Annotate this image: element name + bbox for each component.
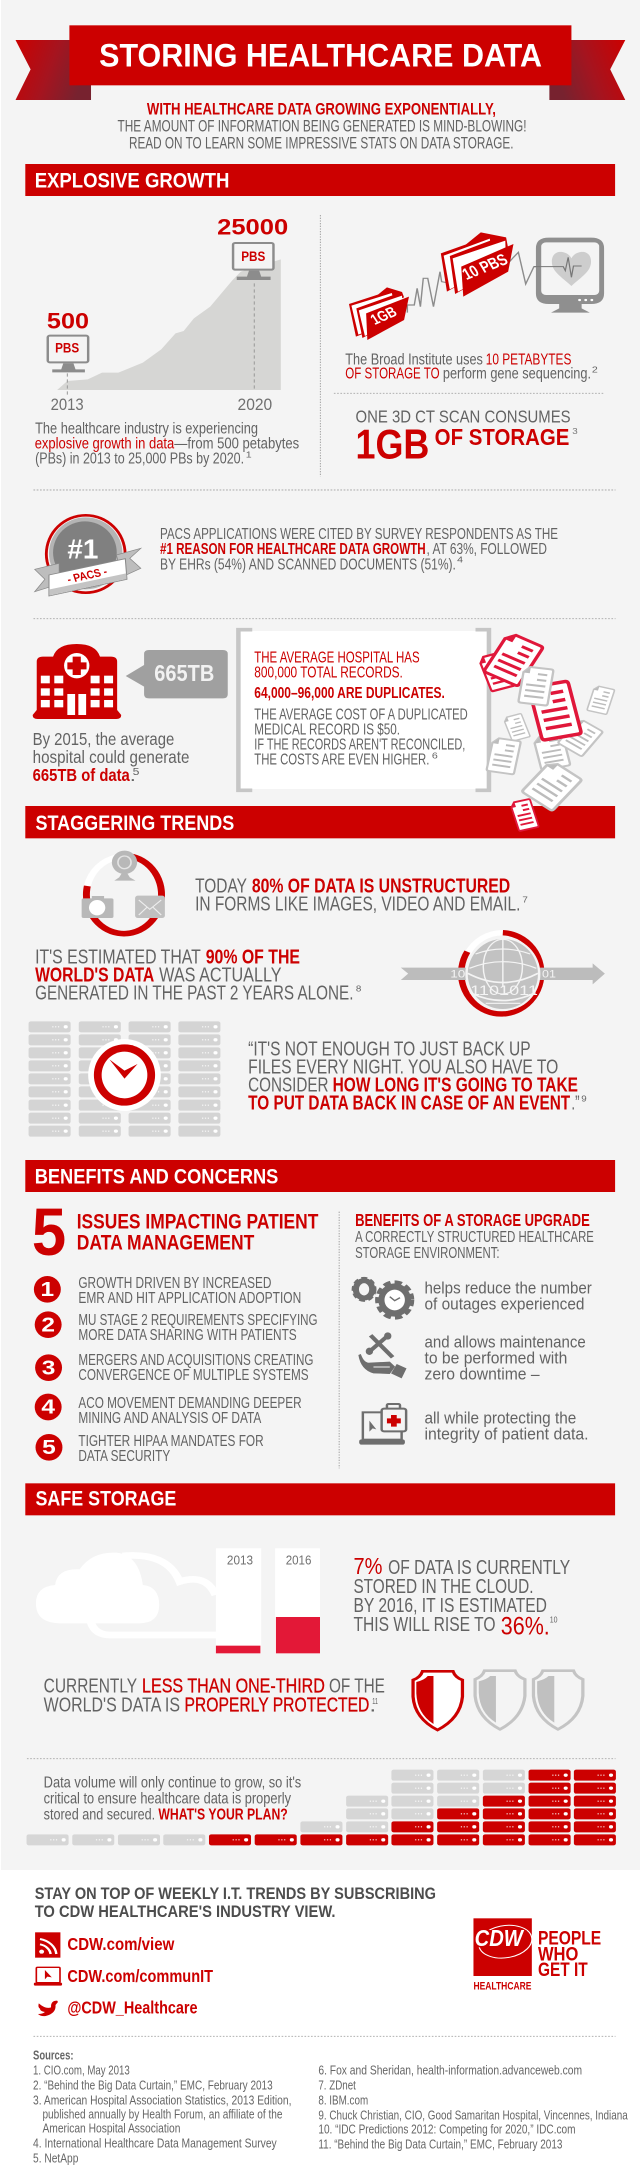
heading: 5 issues (32, 1195, 319, 1269)
icon: 10 PBS folder (441, 232, 513, 297)
500 PBs monitor (47, 310, 89, 372)
logo: CDW (473, 1918, 601, 1992)
text: one-third protected: 11 (372, 1697, 378, 1706)
text: quote on backups: CONSIDER (248, 1074, 329, 1096)
text: 90% generated: WORLD'S DATA (35, 964, 154, 986)
text: sources left column: published annually by Health Forum, an affiliate of the (42, 2107, 283, 2121)
icon: laptop with medical kit (359, 1404, 406, 1445)
text: 2015 hospital data (33, 730, 189, 785)
panel: staggering trends (29, 851, 605, 1137)
panel: records box with brackets: 800,000 TOTAL RECORDS. (254, 663, 403, 681)
year labels (51, 395, 272, 414)
text: 2015 hospital data: . (130, 766, 136, 785)
heading: 5 issues: DATA MANAGEMENT (77, 1231, 255, 1255)
text: sources left column: 2. “Behind the Big Data Curtain,” EMC, February 2013 (33, 2078, 273, 2092)
logo: CDW: WHO (538, 1942, 578, 1965)
icon: tools over hand (358, 1332, 407, 1378)
panel: records box with brackets (238, 630, 489, 790)
callout: 665TB: 665TB (154, 661, 214, 686)
heading: benefits of a storage upgrade (355, 1211, 594, 1262)
text: 7% to 36%: STORED IN THE CLOUD. (353, 1575, 533, 1597)
year labels: 2013 (51, 395, 84, 414)
text: one-third protected: . (369, 1694, 376, 1716)
list item 5: TIGHTER HIPAA MANDATES FOR (78, 1432, 264, 1450)
intro text (118, 99, 527, 152)
stat: 1GB CT scan (356, 407, 578, 467)
text: outages: of outages experienced (424, 1294, 584, 1313)
bar chart: cloud storage share: 2016 (286, 1554, 311, 1568)
text: PACS applications: BY EHRs (54%) AND SCANNED DOCUMENTS (51%). (160, 555, 456, 573)
icon: globe with binary arrow: 1101011 (470, 983, 538, 999)
list item 5: 5 (42, 1436, 56, 1458)
text: what's your plan: WHAT'S YOUR PLAN? (158, 1805, 288, 1823)
panel: records box with brackets: MEDICAL RECORD IS $50. (254, 720, 400, 738)
icon: monitor with heart (534, 238, 604, 313)
section bar: benefits and concerns: BENEFITS AND CONCERNS (35, 1165, 278, 1189)
panel: records box with brackets: 6 (432, 751, 438, 761)
25000 PBs monitor: PBS (241, 249, 265, 265)
list item 3 (35, 1351, 313, 1384)
list item 3: MERGERS AND ACQUISITIONS CREATING (78, 1351, 313, 1369)
list item 4: MINING AND ANALYSIS OF DATA (78, 1409, 262, 1427)
text: industry growth: The healthcare industry is experiencing (35, 419, 258, 437)
text: one-third protected (44, 1675, 385, 1716)
text: outages (424, 1278, 592, 1313)
text: sources left column: 1. CIO.com, May 2013 (33, 2063, 130, 2077)
text: 7% to 36%: 7% (353, 1554, 382, 1579)
panel: footer (33, 1884, 628, 2165)
stat: 1GB CT scan: 3 (572, 427, 578, 436)
500 PBs monitor: 500 (47, 310, 89, 334)
text: one-third protected: PROPERLY PROTECTED (184, 1694, 369, 1716)
area chart: data growth 2013 to 2020 (47, 216, 288, 414)
list item 1 (34, 1274, 301, 1307)
logo: CDW: HEALTHCARE (473, 1979, 531, 1992)
text: PACS applications (160, 525, 558, 573)
section bar: safe storage (25, 1483, 615, 1515)
text: Broad Institute: OF STORAGE TO (345, 364, 440, 382)
heading: 5 issues: 5 (32, 1195, 66, 1269)
text: 7% to 36% (353, 1554, 570, 1640)
500 PBs monitor: PBS (55, 341, 79, 356)
icon: 1GB folder: 1GB (367, 304, 400, 328)
text: industry growth: —from 500 petabytes (174, 434, 299, 452)
text: sources right column: 7. ZDnet (318, 2078, 356, 2092)
heading: subscribe: TO CDW HEALTHCARE'S INDUSTRY VIEW. (35, 1902, 336, 1921)
icon: 10 PBS folder: 10 PBS (459, 250, 511, 283)
section bar: explosive growth (25, 164, 615, 196)
text: industry growth: explosive growth in data (35, 434, 175, 452)
text: 90% generated: IT'S ESTIMATED THAT (35, 945, 201, 968)
icon: ring with webcam, camera and envelope (82, 851, 165, 934)
text: industry growth: 1 (246, 450, 252, 460)
panel: safe storage (25, 1483, 616, 1845)
text: 90% generated: 90% OF THE (206, 945, 300, 968)
list item 4: 4 (41, 1396, 56, 1418)
text: 2015 hospital data: 5 (133, 767, 139, 778)
text: sources right column (318, 2063, 628, 2151)
section bar: benefits and concerns (25, 1160, 615, 1192)
icon: gears with clock (353, 1278, 412, 1318)
list item 3: 3 (42, 1356, 55, 1379)
text: Broad Institute: The Broad Institute uses (345, 350, 483, 368)
icon: clock (88, 1039, 161, 1111)
text: 2015 hospital data: By 2015, the average (33, 730, 174, 749)
text: what's your plan (44, 1773, 301, 1823)
bar chart: cloud storage share (216, 1548, 320, 1653)
panel: records box with brackets: THE AVERAGE COST OF A DUPLICATED (254, 705, 468, 723)
icon: red shield (413, 1671, 462, 1730)
badge: #1 PACS: - PACS - (65, 565, 109, 586)
text: sources left column: 3. American Hospital Association Statistics, 2013 Edition, (33, 2093, 291, 2107)
text: sources left column (33, 2048, 291, 2165)
list item 4: ACO MOVEMENT DEMANDING DEEPER (78, 1394, 302, 1412)
text: one-third protected: LESS THAN ONE-THIRD (142, 1675, 325, 1697)
icon: gray shield (475, 1671, 525, 1729)
text: maintenance: to be performed with (424, 1348, 567, 1367)
text: 80% unstructured: TODAY (195, 874, 247, 897)
badge: #1 PACS (35, 514, 141, 596)
list item 2: MORE DATA SHARING WITH PATIENTS (78, 1326, 297, 1344)
panel: records box with brackets: THE COSTS ARE EVEN HIGHER. (254, 750, 429, 768)
list item 1: EMR AND HIT APPLICATION ADOPTION (78, 1289, 301, 1307)
section bar: staggering trends (25, 806, 615, 838)
text: quote on backups: .” (571, 1092, 580, 1114)
text: quote on backups (248, 1038, 587, 1114)
panel: records box with brackets: THE AVERAGE HOSPITAL HAS (254, 648, 420, 666)
text: 90% generated: 8 (356, 985, 361, 993)
text: 7% to 36%: 36%. (501, 1612, 550, 1640)
section bar: safe storage: SAFE STORAGE (36, 1487, 176, 1511)
text: industry growth: (PBs) in 2013 to 25,000 PBs by 2020. (35, 449, 244, 467)
icon: globe with binary arrow: 10 (450, 967, 465, 980)
heading: 5 issues: ISSUES IMPACTING PATIENT (77, 1210, 319, 1234)
section bar: staggering trends: STAGGERING TRENDS (36, 811, 234, 835)
panel: records box with brackets: IF THE RECORDS AREN'T RECONCILED, (254, 735, 465, 753)
heading: subscribe: STAY ON TOP OF WEEKLY I.T. TRENDS BY SUBSCRIBING (35, 1884, 436, 1903)
icon: 1GB folder (349, 287, 409, 340)
text: integrity (424, 1408, 589, 1443)
text: 7% to 36%: 10 (550, 1615, 558, 1624)
text: one-third protected: CURRENTLY (44, 1675, 137, 1697)
text: 2015 hospital data: hospital could generate (33, 748, 189, 767)
text: integrity: all while protecting the (424, 1408, 576, 1427)
chart: rising server stacks (27, 1770, 616, 1845)
text: 80% unstructured: 7 (522, 895, 528, 904)
list item 1: 1 (41, 1278, 54, 1300)
link: communIT (34, 1967, 214, 1986)
text: what's your plan: critical to ensure healthcare data is properly (44, 1789, 291, 1807)
text: PACS applications: , AT 63%, FOLLOWED (427, 540, 547, 558)
badge: #1 PACS: #1 (67, 533, 98, 565)
icon: hospital (33, 644, 121, 719)
list item 5: DATA SECURITY (78, 1447, 171, 1465)
list item 2 (35, 1311, 318, 1344)
panel: PACS and hospital records (33, 490, 616, 790)
link: communIT: CDW.com/communIT (67, 1967, 214, 1986)
text: one-third protected: WORLD'S DATA IS (44, 1694, 180, 1716)
year labels: 2020 (238, 395, 272, 414)
bar chart: cloud storage share: 2013 (227, 1554, 253, 1568)
text: quote on backups: 9 (581, 1095, 587, 1103)
icon: globe with binary arrow (401, 933, 605, 1014)
text: maintenance: and allows maintenance (424, 1332, 586, 1351)
link: twitter (38, 1998, 198, 2018)
text: maintenance: zero downtime – (424, 1364, 540, 1383)
list item 1: GROWTH DRIVEN BY INCREASED (78, 1274, 271, 1292)
panel: header and explosive growth (16, 25, 625, 490)
logo: CDW: PEOPLE (538, 1926, 601, 1949)
text: sources left column: American Hospital Association (42, 2121, 180, 2135)
icon: folders, heartbeat line and monitor (349, 232, 604, 340)
heading: subscribe (35, 1884, 436, 1921)
text: integrity: integrity of patient data. (424, 1424, 589, 1443)
text: sources left column: 4. International Healthcare Data Management Survey (33, 2136, 277, 2150)
text: sources left column: Sources: (33, 2048, 73, 2062)
25000 PBs monitor: 25000 (217, 216, 288, 240)
text: sources left column: 5. NetApp (33, 2151, 78, 2165)
link: twitter: @CDW_Healthcare (67, 1998, 198, 2018)
text: Broad Institute: 10 PETABYTES (486, 350, 571, 368)
stat: 1GB CT scan: 1GB (356, 421, 429, 467)
text: 90% generated (35, 945, 361, 1004)
text: 90% generated: WAS ACTUALLY (159, 964, 282, 986)
text: Broad Institute: 2 (592, 366, 598, 375)
icon: scattered documents (478, 632, 615, 831)
text: Broad Institute (345, 350, 598, 382)
panel: benefits and concerns (25, 1160, 615, 1468)
heading: benefits of a storage upgrade: STORAGE ENVIRONMENT: (355, 1244, 500, 1262)
link: RSS: CDW.com/view (67, 1935, 175, 1954)
icon: cloud (36, 1553, 218, 1635)
text: 7% to 36%: THIS WILL RISE TO (353, 1613, 496, 1635)
icon: server grid with clock (29, 1021, 220, 1137)
text: what's your plan: stored and secured. (44, 1805, 155, 1823)
icon: gray shield (533, 1671, 583, 1729)
25000 PBs monitor (217, 216, 288, 280)
text: 80% unstructured (195, 874, 528, 915)
link: RSS (35, 1932, 175, 1958)
list item 5 (36, 1432, 264, 1465)
text: one-third protected: OF THE (329, 1675, 385, 1697)
list item 2: 2 (41, 1313, 55, 1336)
text: PACS applications: 4 (457, 556, 464, 565)
text: PACS applications: #1 REASON FOR HEALTHCARE DATA GROWTH (160, 540, 426, 558)
panel: records box with brackets: 64,000–96,000 ARE DUPLICATES. (254, 684, 445, 702)
text: what's your plan: Data volume will only continue to grow, so it's (44, 1773, 301, 1791)
stat: 1GB CT scan: OF STORAGE (435, 424, 569, 450)
list item 3: CONVERGENCE OF MULTIPLE SYSTEMS (78, 1366, 309, 1384)
title ribbon (16, 25, 625, 100)
text: maintenance (424, 1332, 586, 1383)
list item 4 (35, 1394, 302, 1427)
logo: CDW: CDW (475, 1926, 525, 1951)
text: sources right column: 8. IBM.com (318, 2093, 368, 2107)
text: industry growth (35, 419, 299, 467)
icon: globe with binary arrow: 01 (542, 967, 556, 980)
list item 2: MU STAGE 2 REQUIREMENTS SPECIFYING (78, 1311, 318, 1329)
text: 90% generated: GENERATED IN THE PAST 2 YEARS ALONE. (35, 982, 353, 1004)
section bar: explosive growth: EXPLOSIVE GROWTH (35, 169, 229, 193)
text: 2015 hospital data: 665TB of data (33, 766, 130, 785)
logo: CDW: GET IT (538, 1958, 588, 1980)
callout: 665TB (126, 650, 228, 698)
